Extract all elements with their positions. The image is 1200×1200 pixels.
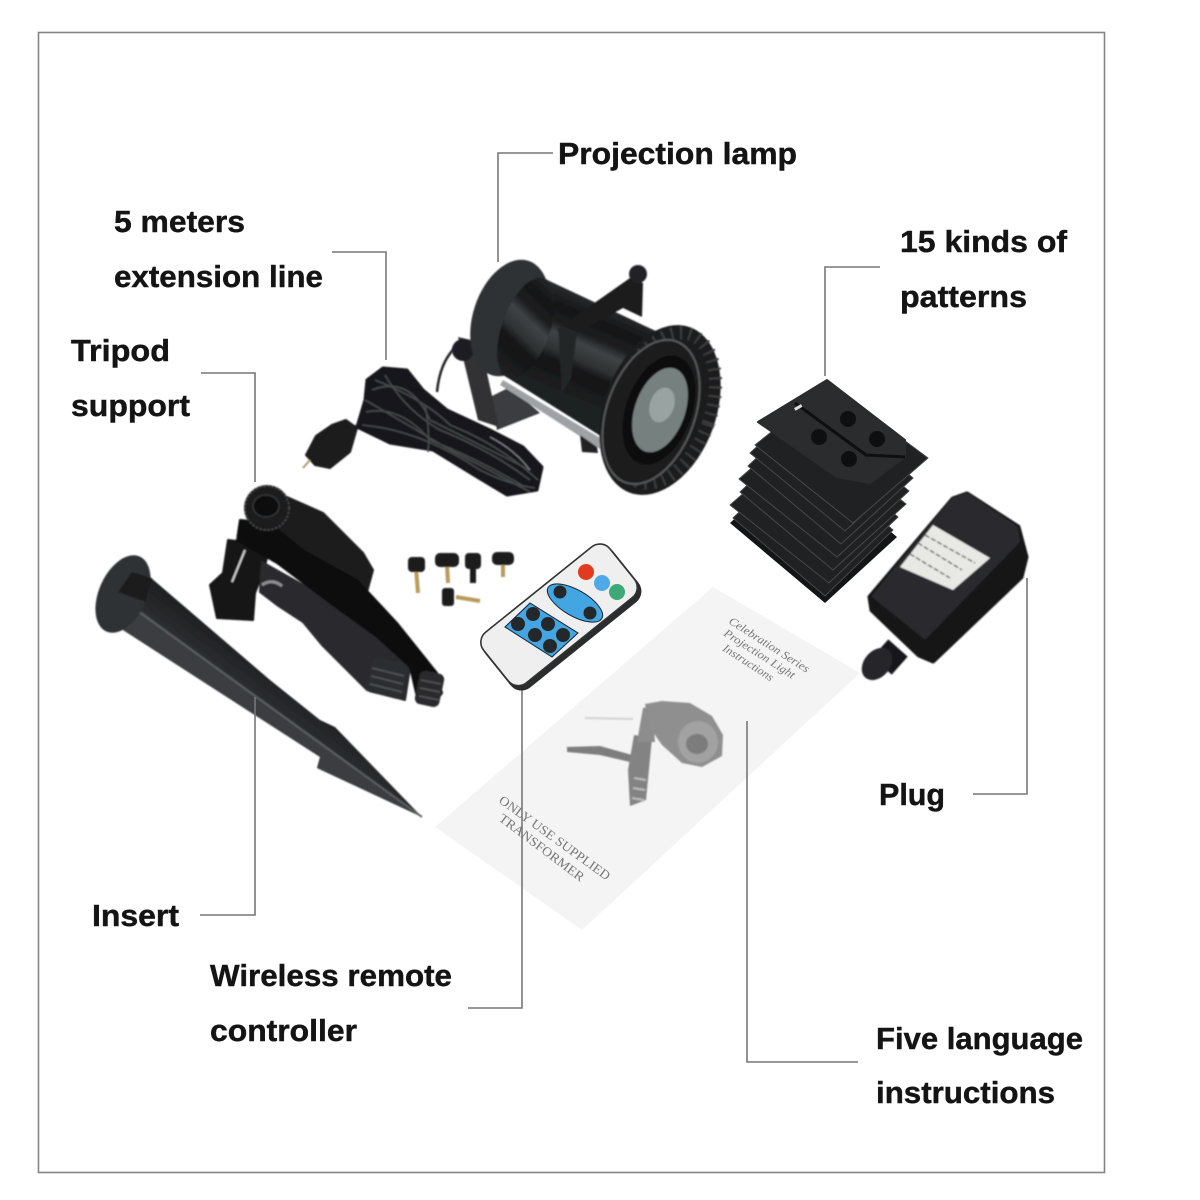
product: projection lamp [452,250,743,512]
label: Projection lamp: Projection lamp [558,136,797,171]
label: Tripod support: support [71,388,190,423]
product: pattern slides stack [730,380,928,603]
remote blue keypad [505,576,608,657]
label: Tripod support [71,333,190,423]
booklet title text [719,615,812,684]
lamp bracket [558,265,647,392]
leader line: extension line [332,252,386,360]
label: Five language instructions: instructions [876,1075,1055,1110]
remote top buttons [578,564,625,600]
booklet title text: Instructions [719,642,776,684]
label: Insert: Insert [92,898,179,933]
leader line: wireless remote controller [468,668,522,1008]
product: instructions booklet [435,587,860,930]
booklet title text: Celebration Series [726,615,812,676]
label: Five language instructions: Five language [876,1021,1083,1056]
label: 15 kinds of patterns: patterns [900,279,1027,314]
label: Plug: Plug [879,777,945,812]
booklet lamp picture [567,701,723,806]
label: Five language instructions [876,1021,1083,1110]
adapter label [900,525,990,590]
product: tripod support [210,485,445,708]
product: extension cable [303,345,542,495]
label: Tripod support: Tripod [71,333,170,368]
lamp body [485,270,660,460]
product: power adapter plug [855,494,1026,686]
product: thumb screws [408,552,514,606]
label: 5 meters extension line: extension line [114,259,323,294]
leader line: projection lamp [498,153,553,262]
lamp back cap [456,250,564,386]
leader line: plug [973,578,1027,794]
lamp front ring [577,308,743,512]
leader line: five language instructions [747,721,858,1062]
label: Wireless remote controller [210,958,452,1048]
booklet warning text: TRANSFORMER [496,810,588,885]
lamp lens [621,360,699,460]
label: 5 meters extension line [114,204,323,294]
label: 15 kinds of patterns [900,224,1068,314]
label: 15 kinds of patterns: 15 kinds of [900,224,1068,259]
label: Wireless remote controller: controller [210,1013,357,1048]
label: 5 meters extension line: 5 meters [114,204,245,239]
product: wireless remote controller [476,539,647,696]
leader line: insert [200,697,255,915]
leader line: tripod support [201,373,255,482]
booklet title text: Projection Light [720,627,798,682]
label: Wireless remote controller: Wireless remote [210,958,452,993]
product: stake insert [84,547,422,817]
leader line: patterns [825,267,880,376]
booklet warning text: ONLY USE SUPPLIED [496,792,613,883]
lamp foot and arm [452,337,540,430]
top pattern slide [758,380,905,483]
